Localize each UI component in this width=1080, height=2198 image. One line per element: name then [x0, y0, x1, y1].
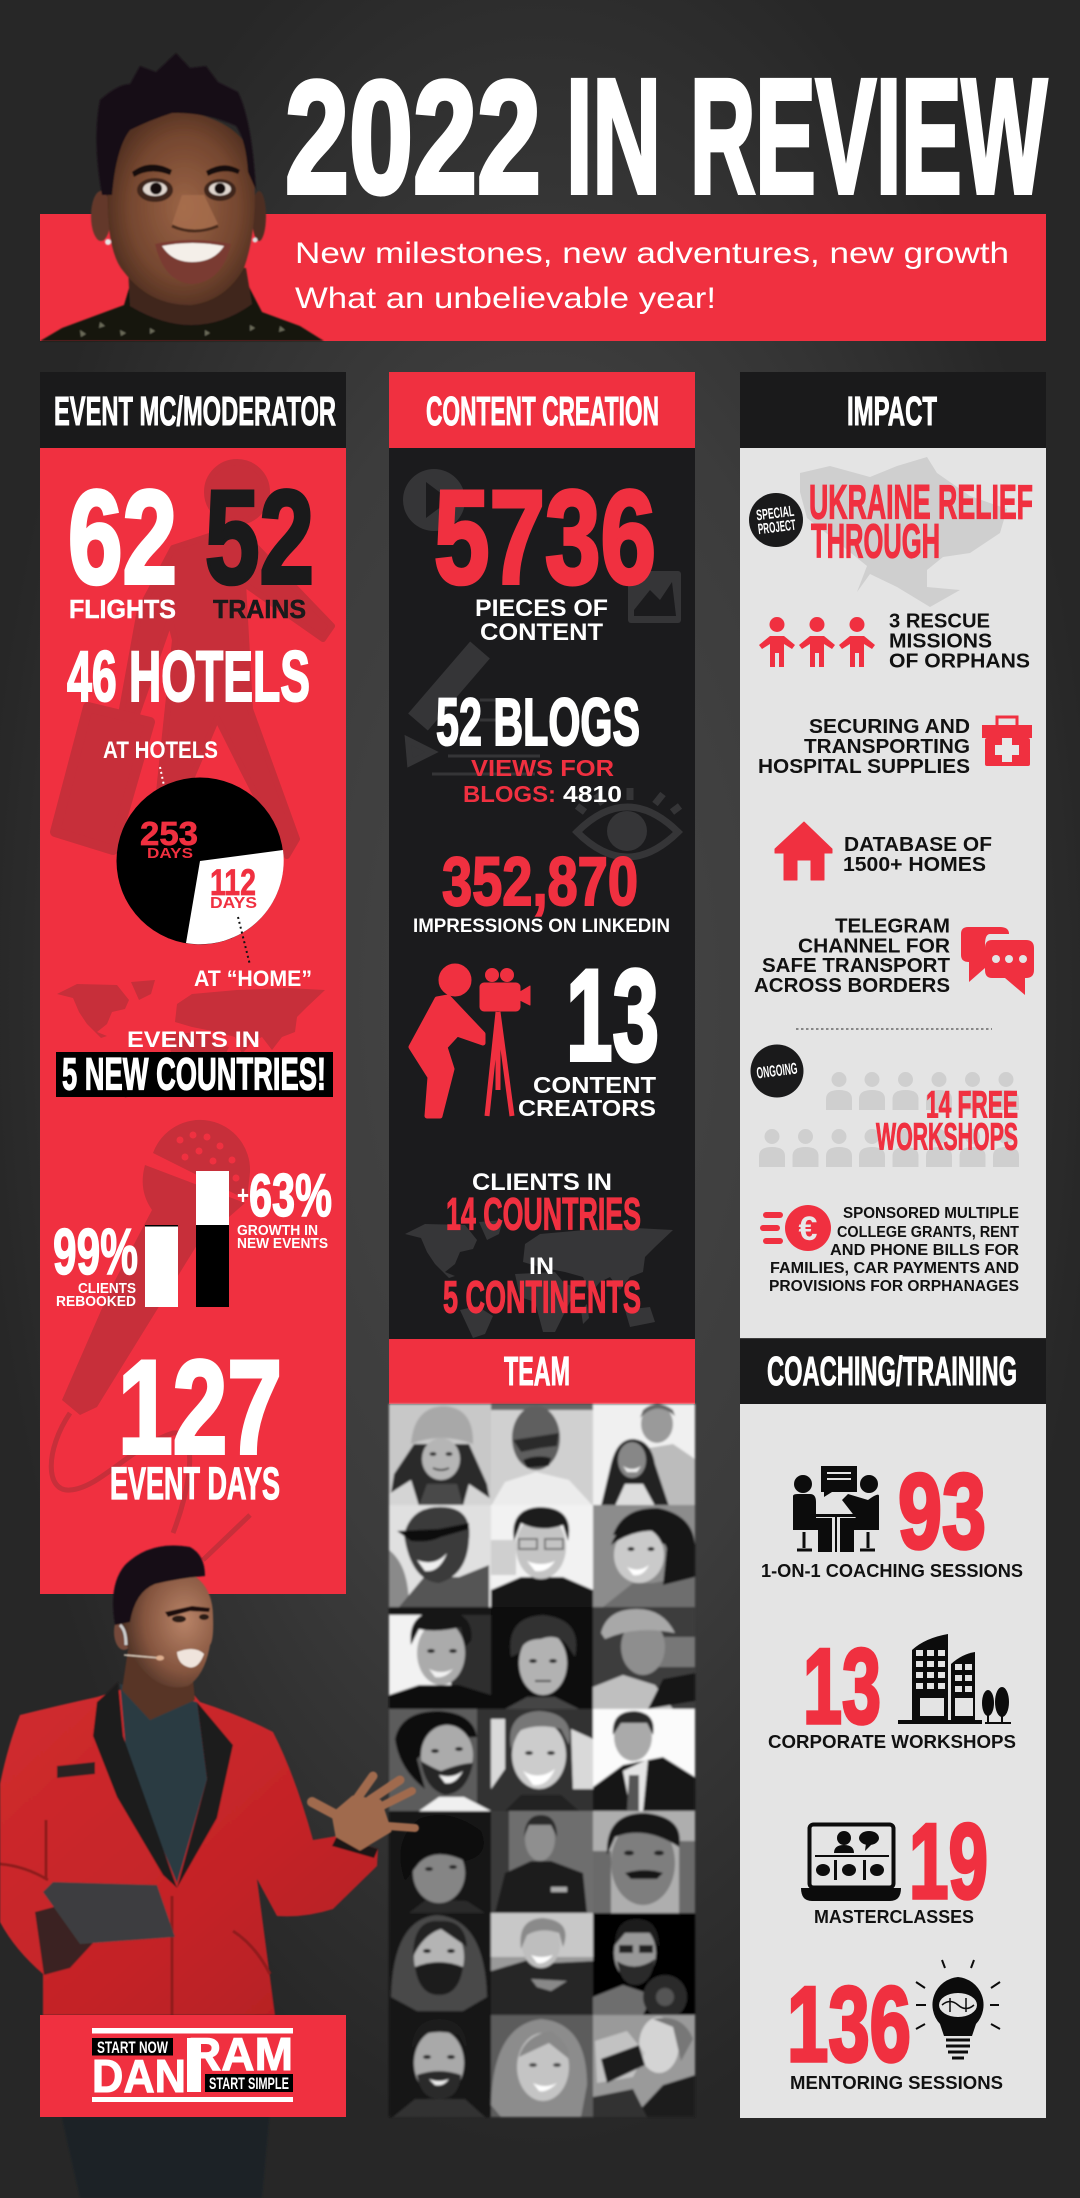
text: 3 rescue missions of orphans	[889, 610, 1030, 672]
icon: two people at table	[793, 1466, 879, 1552]
stat: 46 hotels: 46 HOTELS	[67, 638, 310, 717]
icon: ghost eye	[577, 788, 680, 857]
stat: 52 blogs	[436, 685, 640, 807]
bar chart: clients rebooked and growth: NEW EVENTS	[237, 1236, 328, 1252]
photo: member 13	[388, 1810, 492, 1914]
header: coaching/training	[740, 1339, 1046, 1404]
pocket	[57, 1762, 95, 1778]
icon: ghost microphone	[51, 1120, 250, 1560]
photo: member 20	[489, 2014, 594, 2118]
stat: 19 masterclasses: 19	[909, 1801, 988, 1921]
stat: 127 event days: 127	[118, 1334, 282, 1482]
logo panel: dan ram: DAN	[92, 2050, 186, 2102]
icon: euro coin: €	[799, 1210, 818, 1248]
stat: 13 corporate workshops: CORPORATE WORKSHOPS	[768, 1731, 1016, 1752]
subtitle line 2: What an unbelievable year!	[295, 282, 716, 315]
stat: clients in 14 countries in 5 continents: IN	[529, 1253, 554, 1280]
jacket creases	[0, 1820, 270, 2015]
panel: event mc / moderator	[40, 372, 346, 1594]
stat: clients in 14 countries in 5 continents	[443, 1169, 641, 1322]
header: content creation: CONTENT CREATION	[426, 388, 659, 434]
pie chart: days at hotels vs home: AT HOTELS	[103, 737, 218, 764]
icon: ukraine map	[800, 457, 1007, 607]
text: sponsorships: COLLEGE GRANTS, RENT	[837, 1224, 1019, 1241]
text: sponsorships	[769, 1205, 1019, 1295]
header: event mc/moderator	[40, 372, 346, 448]
photo: member 7	[387, 1606, 492, 1710]
text: 3 rescue missions of orphans: 3 RESCUE	[889, 610, 990, 632]
icon: three children	[759, 617, 875, 667]
figure: speaker in red jacket	[0, 1545, 415, 2198]
logo panel: dan ram: RAM	[188, 2028, 293, 2080]
stat: 52 trains: 52	[205, 464, 314, 612]
stat: 52 trains: TRAINS	[213, 594, 306, 624]
stat: 52 blogs: 4810	[563, 781, 622, 807]
logo panel: dan ram: START NOW	[97, 2038, 169, 2057]
bar chart: clients rebooked and growth: REBOOKED	[56, 1294, 136, 1310]
photo: member 2	[489, 1402, 594, 1507]
header: team: TEAM	[504, 1348, 570, 1394]
icon: ghost play button	[403, 469, 465, 531]
stat: 13 content creators	[518, 942, 659, 1121]
icon: light bulb with brain	[916, 1960, 1000, 2058]
panel: content creation	[389, 372, 695, 1339]
icon: speech bubbles	[961, 927, 1034, 995]
header: impact: IMPACT	[847, 388, 937, 434]
photo: member 21	[592, 2012, 696, 2116]
bar chart: clients rebooked and growth: 63%	[249, 1162, 332, 1229]
icon: euro coin	[760, 1205, 831, 1251]
header: team	[389, 1339, 695, 1404]
events in 5 new countries	[56, 1027, 333, 1100]
header: content creation	[389, 372, 695, 448]
text: securing and transporting hospital supplies: HOSPITAL SUPPLIES	[758, 756, 970, 778]
stat: 127 event days	[110, 1334, 282, 1509]
text: 3 rescue missions of orphans: OF ORPHANS	[889, 650, 1030, 672]
logo panel: dan ram	[40, 2015, 346, 2117]
stat: 19 masterclasses: MASTERCLASSES	[814, 1906, 974, 1927]
icon: ghost traveller with suitcase	[55, 462, 332, 856]
stat: 5736 pieces of content: PIECES OF	[475, 595, 608, 622]
badge: special project	[749, 493, 803, 547]
stat: 93 coaching sessions: 93	[898, 1451, 986, 1571]
icon: laptop with video call	[801, 1824, 901, 1901]
stat: 13 content creators: CREATORS	[518, 1095, 656, 1121]
stat: 127 event days: EVENT DAYS	[110, 1458, 280, 1509]
text: telegram channel: TELEGRAM	[835, 916, 950, 938]
photo: member 9	[590, 1607, 696, 1710]
stat: clients in 14 countries in 5 continents: 5 CONTINENTS	[443, 1272, 641, 1322]
stat: 136 mentoring sessions: 136	[787, 1964, 911, 2084]
photo: member 5	[489, 1503, 595, 1608]
text: securing and transporting hospital supplies: TRANSPORTING	[804, 736, 970, 758]
title	[285, 44, 1047, 228]
events in 5 new countries: EVENTS IN	[127, 1027, 260, 1052]
photo: member 4	[388, 1503, 494, 1610]
photo: member 16	[388, 1912, 492, 2016]
bar chart: clients rebooked and growth: 99%	[53, 1215, 138, 1288]
stat: 14 free workshops: 14 FREE	[926, 1084, 1018, 1126]
header: event mc/moderator: EVENT MC/MODERATOR	[54, 388, 336, 434]
icon: ghost world map	[405, 1220, 673, 1338]
lapels	[93, 1682, 233, 1888]
stat: 62 flights: 62	[68, 464, 177, 612]
stat: clients in 14 countries in 5 continents: CLIENTS IN	[472, 1169, 612, 1196]
text: 3 rescue missions of orphans: MISSIONS	[889, 630, 992, 652]
photo: member 8	[490, 1606, 594, 1710]
photo: member 10	[388, 1707, 492, 1814]
photo: member 14	[490, 1810, 594, 1914]
pie chart: days at hotels vs home: 112	[210, 862, 256, 903]
stat: 93 coaching sessions	[761, 1451, 1023, 1581]
bar chart: clients rebooked and growth	[53, 1162, 332, 1310]
stat: 136 mentoring sessions: MENTORING SESSIONS	[790, 2072, 1003, 2093]
photo: member 12	[590, 1706, 697, 1813]
head	[113, 1545, 213, 1687]
photo: member 17	[488, 1910, 596, 1992]
stat: 352,870 impressions: 352,870	[442, 843, 638, 920]
stat: 62 flights	[68, 464, 177, 624]
photo: member 1	[388, 1402, 493, 1506]
pie chart: days at hotels vs home: DAYS	[147, 845, 193, 862]
subtitle line 1: New milestones, new adventures, new growth	[295, 237, 1009, 270]
icon: first aid box	[982, 717, 1032, 766]
title: IN	[566, 44, 661, 228]
stat: 5736 pieces of content	[434, 464, 656, 646]
bar chart: clients rebooked and growth: +	[237, 1180, 249, 1210]
bar chart: clients rebooked and growth: CLIENTS	[78, 1281, 136, 1297]
stat: 13 corporate workshops: 13	[803, 1626, 881, 1746]
stat: clients in 14 countries in 5 continents: 14 COUNTRIES	[446, 1188, 641, 1240]
stat: 52 blogs: BLOGS:	[463, 781, 556, 807]
icon: videographer with camera	[411, 964, 530, 1116]
stat: 5736 pieces of content: 5736	[434, 464, 656, 612]
stat: 352,870 impressions	[413, 843, 670, 937]
text: database of 1500+ homes: 1500+ HOMES	[843, 854, 986, 876]
stat: 13 content creators: 13	[566, 942, 659, 1088]
pie chart: days at hotels vs home: DAYS	[210, 895, 257, 912]
text: securing and transporting hospital supplies	[758, 716, 970, 778]
icon: ghost pencil and lines	[408, 650, 540, 774]
panel: team	[389, 1339, 695, 2117]
badge: ongoing: ONGOING	[756, 1061, 798, 1082]
photo: member 11	[489, 1709, 596, 1811]
badge: special project: SPECIAL	[755, 503, 795, 524]
header: impact	[740, 372, 1046, 448]
pie chart: days at hotels vs home: 253	[140, 815, 198, 852]
icon: audience of workshop attendees	[759, 1072, 1019, 1167]
title: 2022	[285, 48, 541, 226]
stat: 52 trains	[205, 464, 314, 624]
pie chart: days at hotels vs home	[103, 737, 312, 991]
text: securing and transporting hospital supplies: SECURING AND	[809, 716, 970, 738]
jacket	[0, 1690, 378, 2015]
banner: subtitle	[40, 214, 1046, 341]
photo: member 19	[388, 2014, 492, 2118]
stat: 13 corporate workshops	[768, 1626, 1016, 1752]
tablet	[43, 1882, 175, 1944]
stat: 62 flights: FLIGHTS	[69, 594, 176, 624]
portrait: smiling man	[40, 53, 324, 341]
shirt	[120, 1684, 207, 1883]
text: telegram channel: SAFE TRANSPORT	[762, 955, 950, 977]
heading: ukraine relief through: THROUGH	[811, 516, 940, 568]
trousers	[60, 2110, 270, 2198]
icon: office buildings and trees	[898, 1634, 1011, 1724]
text: database of 1500+ homes	[843, 834, 992, 876]
text: sponsorships: SPONSORED MULTIPLE	[843, 1205, 1019, 1222]
stat: 93 coaching sessions: 1-ON-1 COACHING SESSIONS	[761, 1560, 1023, 1581]
icon: ghost image	[628, 571, 681, 623]
text: telegram channel: CHANNEL FOR	[798, 936, 951, 958]
text: telegram channel: ACROSS BORDERS	[754, 975, 950, 997]
stat: 13 content creators: CONTENT	[533, 1072, 656, 1098]
logo panel: dan ram: START SIMPLE	[209, 2074, 289, 2093]
neck	[122, 1650, 195, 1720]
photo: member 3	[591, 1402, 697, 1507]
stat: 14 free workshops	[876, 1084, 1018, 1158]
text: telegram channel	[754, 916, 951, 997]
raised hand	[312, 1776, 415, 1849]
photo: member 6	[590, 1503, 696, 1609]
icon: house	[775, 822, 832, 880]
pie chart: days at hotels vs home: AT “HOME”	[194, 966, 312, 991]
stat: 5736 pieces of content: CONTENT	[480, 619, 603, 646]
hand on tablet	[35, 1900, 105, 1975]
stat: 352,870 impressions: IMPRESSIONS ON LINKEDIN	[413, 916, 670, 937]
text: sponsorships: PROVISIONS FOR ORPHANAGES	[769, 1278, 1019, 1295]
photo: member 18	[592, 1912, 696, 2016]
stat: 52 blogs: 52 BLOGS	[436, 685, 640, 760]
events in 5 new countries: 5 NEW COUNTRIES!	[62, 1048, 326, 1100]
stat: 52 blogs: VIEWS FOR	[471, 755, 614, 781]
panel: impact	[740, 372, 1046, 1338]
text: sponsorships: AND PHONE BILLS FOR	[830, 1242, 1019, 1259]
bar chart: clients rebooked and growth: GROWTH IN	[237, 1223, 318, 1239]
badge: special project: PROJECT	[757, 517, 797, 538]
photo grid: team members	[389, 1404, 695, 2117]
icon: ghost world map	[57, 980, 325, 1098]
heading: ukraine relief through	[809, 476, 1033, 568]
badge: ongoing	[750, 1044, 804, 1098]
text: sponsorships: FAMILIES, CAR PAYMENTS AND	[770, 1260, 1019, 1277]
photo: member 15	[592, 1808, 696, 1916]
text: database of 1500+ homes: DATABASE OF	[844, 834, 992, 856]
panel: coaching/training	[740, 1339, 1046, 2118]
cuff	[332, 1836, 378, 1858]
stat: 19 masterclasses	[814, 1801, 988, 1927]
